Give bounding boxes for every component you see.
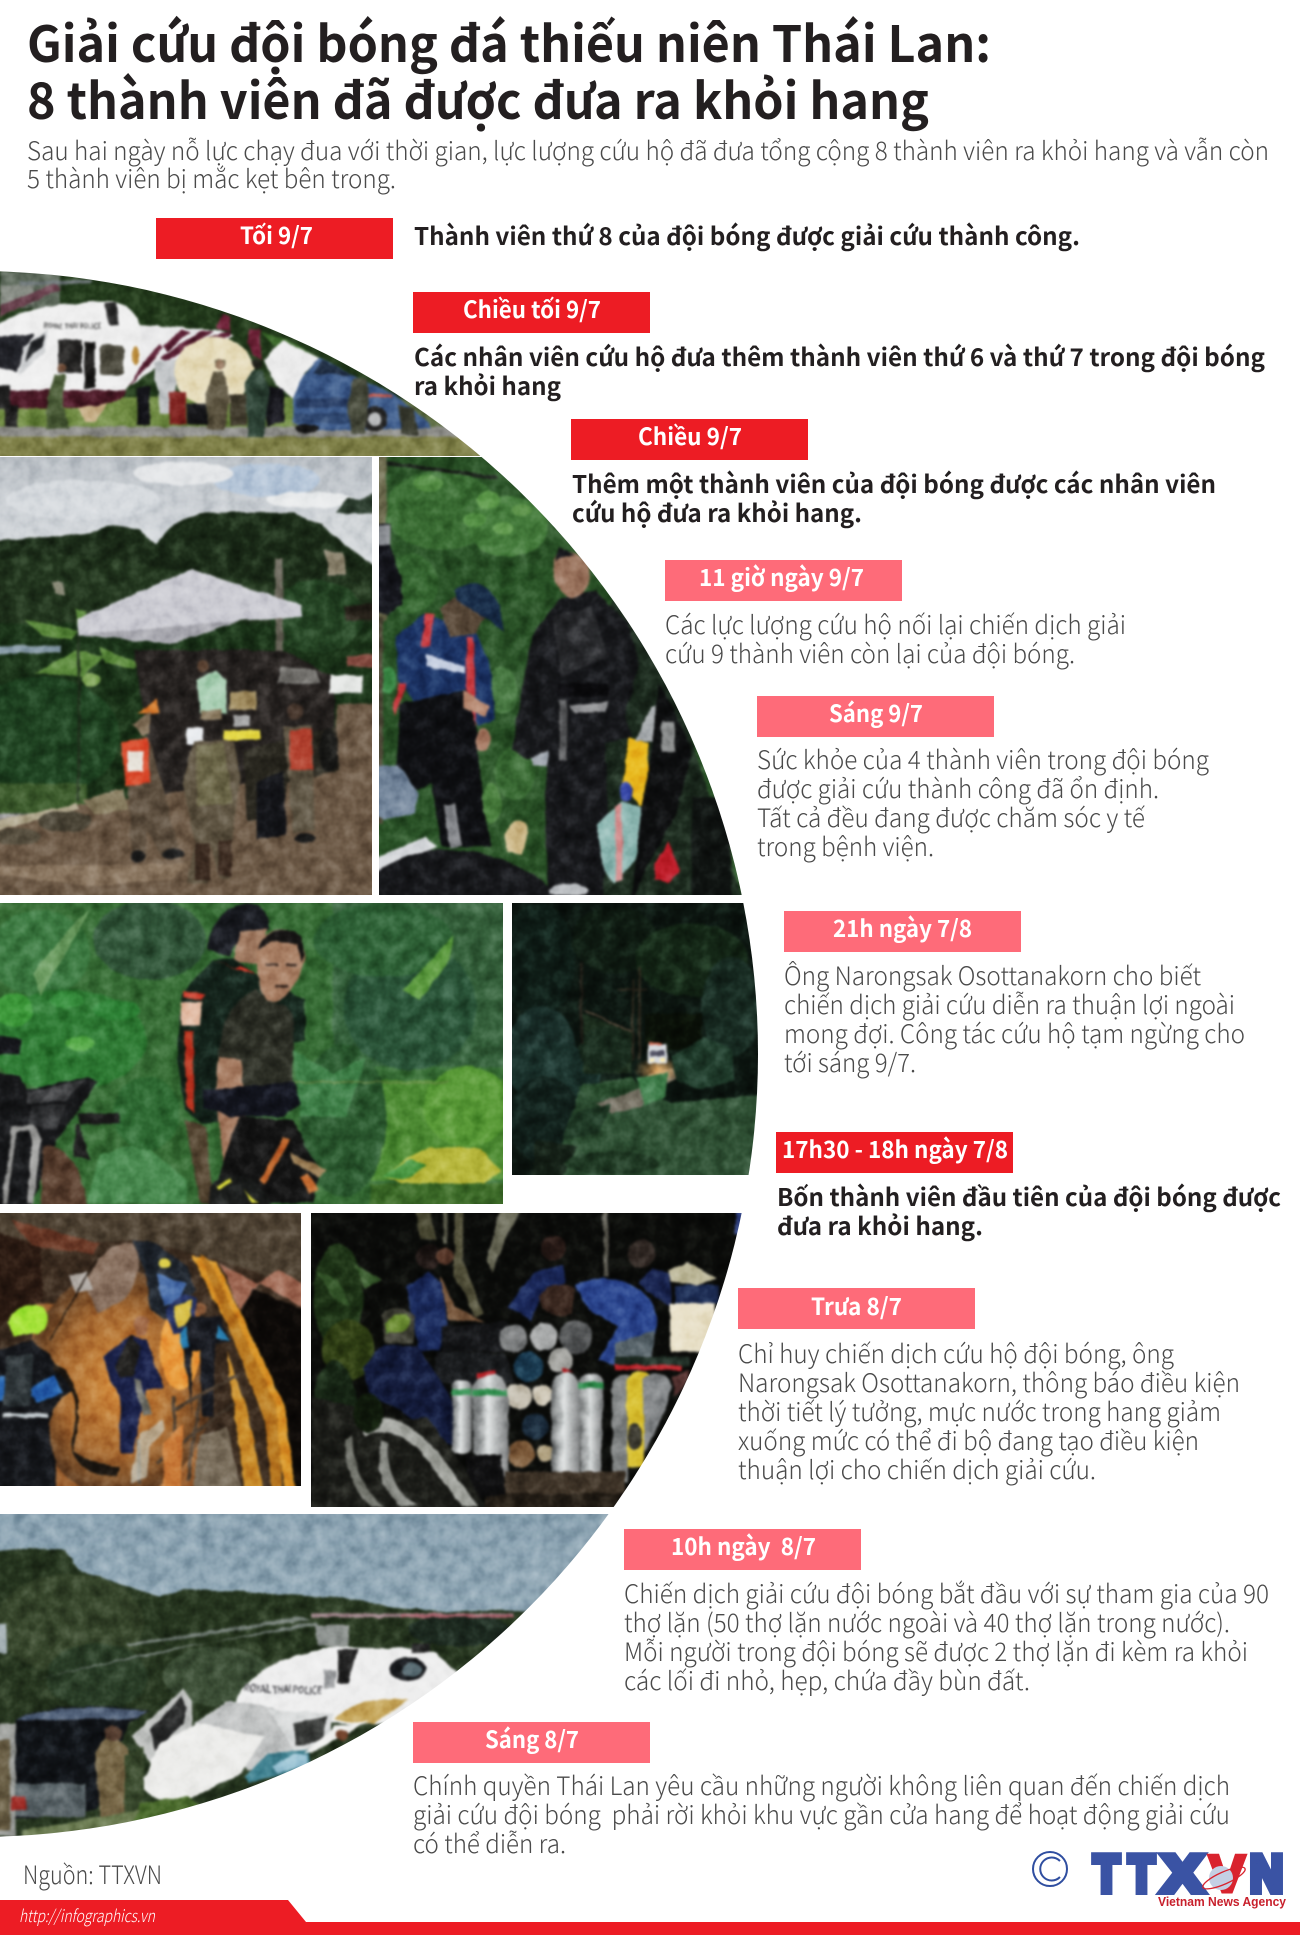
photo: ambulance on a dark forest road — [512, 903, 758, 1175]
timeline item: Trưa 8/7: thời tiết lý tưởng, mực nước trong hang giảm — [738, 1392, 1221, 1429]
icon: globe with orbit — [1201, 1863, 1247, 1893]
timeline item: 21h ngày 7/8: chiến dịch giải cứu diễn ra thuận lợi ngoài — [784, 985, 1235, 1022]
timeline item: Trưa 8/7: Narongsak Osottanakorn, thông báo điều kiện — [738, 1363, 1240, 1400]
timeline item: 11 giờ ngày 9/7: cứu 9 thành viên còn lại của đội bóng. — [665, 634, 1075, 671]
timeline item: 21h ngày 7/8: 21h ngày 7/8 — [833, 910, 972, 944]
photo: police helicopter on the ground — [0, 271, 480, 456]
photo: police helicopter on the ground: ROYAL THAI POLICE — [44, 320, 102, 331]
title: 8 thành viên đã được đưa ra khỏi hang — [27, 62, 929, 134]
photo: police helicopter with umbrellas — [0, 1514, 608, 1837]
timeline item: Trưa 8/7: thuận lợi cho chiến dịch giải cứu. — [738, 1450, 1096, 1487]
timeline item: Chiều tối 9/7: Chiều tối 9/7 — [463, 291, 601, 325]
timeline item: Chiều tối 9/7: ra khỏi hang — [414, 368, 561, 403]
title: Giải cứu đội bóng đá thiếu niên Thái Lan: — [27, 5, 991, 77]
timeline item: Chiều tối 9/7: Các nhân viên cứu hộ đưa thêm thành viên thứ 6 và thứ 7 trong đội bóng — [414, 339, 1265, 374]
timeline item: Sáng 9/7: Sức khỏe của 4 thành viên trong đội bóng — [757, 740, 1209, 777]
timeline item: 17h30 - 18h ngày 7/8: đưa ra khỏi hang. — [777, 1208, 983, 1243]
timeline item: 10h ngày 8/7: thợ lặn (50 thợ lặn nước ngoài và 40 thợ lặn trong nước). — [624, 1603, 1230, 1640]
timeline item: Trưa 8/7: Chỉ huy chiến dịch cứu hộ đội bóng, ông — [738, 1334, 1174, 1371]
timeline item: Sáng 8/7 — [413, 1721, 1230, 1861]
timeline item: Sáng 9/7: trong bệnh viện. — [757, 827, 934, 864]
logo: TTXVN Vietnam News Agency: T — [1128, 1846, 1155, 1904]
timeline item: 10h ngày 8/7: các lối đi nhỏ, hẹp, chứa đầy bùn đất. — [624, 1661, 1030, 1698]
footer bar: http://infographics.vn — [19, 1902, 156, 1927]
timeline item: Sáng 8/7: Chính quyền Thái Lan yêu cầu những người không liên quan đến chiến dịch — [413, 1766, 1230, 1803]
photo collage clipped to circular arc — [0, 252, 795, 1863]
logo: TTXVN Vietnam News Agency: N — [1250, 1846, 1283, 1904]
footer bar — [0, 1900, 1300, 1935]
subtitle: 5 thành viên bị mắc kẹt bên trong. — [27, 159, 396, 196]
timeline item: 21h ngày 7/8: tới sáng 9/7. — [784, 1043, 916, 1080]
logo: TTXVN Vietnam News Agency: T — [1094, 1846, 1120, 1904]
photo: oxygen tanks at night — [311, 1213, 742, 1507]
timeline item: Chiều 9/7: Chiều 9/7 — [638, 418, 742, 452]
timeline item: Trưa 8/7: xuống mức có thể đi bộ đang tạo điều kiện — [738, 1421, 1199, 1458]
timeline item: Trưa 8/7 — [738, 1288, 1240, 1487]
timeline item: Sáng 8/7: giải cứu đội bóng phải rời khỏi khu vực gần cửa hang để hoạt động giải cứu — [413, 1795, 1230, 1832]
timeline item: Trưa 8/7: Trưa 8/7 — [811, 1288, 902, 1322]
timeline item: Sáng 9/7: Sáng 9/7 — [829, 695, 923, 729]
timeline item: Chiều 9/7: cứu hộ đưa ra khỏi hang. — [572, 495, 862, 530]
photo: rescuers climbing in the cave — [0, 1213, 301, 1486]
logo: TTXVN Vietnam News Agency — [1033, 1846, 1287, 1909]
timeline item: 11 giờ ngày 9/7 — [665, 559, 1126, 671]
timeline item: 17h30 - 18h ngày 7/8: 17h30 - 18h ngày 7/8 — [782, 1131, 1008, 1165]
timeline item: 10h ngày 8/7: Mỗi người trong đội bóng sẽ được 2 thợ lặn đi kèm ra khỏi — [624, 1632, 1248, 1669]
source credit: Nguồn: TTXVN — [23, 1855, 162, 1892]
title — [27, 5, 991, 134]
logo: TTXVN Vietnam News Agency: X — [1162, 1846, 1203, 1904]
timeline item: 21h ngày 7/8: mong đợi. Công tác cứu hộ tạm ngừng cho — [784, 1014, 1245, 1051]
timeline item: Tối 9/7: Tối 9/7 — [240, 217, 313, 251]
photo: police helicopter with umbrellas: ROYAL THAI POLICE — [244, 1681, 323, 1698]
timeline item: 10h ngày 8/7 — [624, 1528, 1269, 1698]
timeline item: Sáng 9/7: được giải cứu thành công đã ổn định. — [757, 769, 1159, 806]
timeline item: 10h ngày 8/7: Chiến dịch giải cứu đội bóng bắt đầu với sự tham gia của 90 — [624, 1574, 1269, 1611]
photo: two rescue workers — [0, 903, 503, 1204]
timeline item: Sáng 9/7 — [757, 695, 1209, 864]
timeline item: Tối 9/7: Thành viên thứ 8 của đội bóng được giải cứu thành công. — [414, 218, 1080, 253]
timeline item: Chiều 9/7: Thêm một thành viên của đội bóng được các nhân viên — [572, 466, 1216, 501]
timeline item: 17h30 - 18h ngày 7/8 — [776, 1131, 1281, 1243]
timeline item: 11 giờ ngày 9/7: 11 giờ ngày 9/7 — [699, 559, 864, 593]
timeline item: 21h ngày 7/8: Ông Narongsak Osottanakorn cho biết — [784, 956, 1201, 993]
timeline item: 17h30 - 18h ngày 7/8: Bốn thành viên đầu tiên của đội bóng được — [777, 1179, 1281, 1214]
timeline item: Sáng 9/7: Tất cả đều đang được chăm sóc y tế — [757, 798, 1145, 835]
timeline item: Chiều 9/7 — [571, 418, 1216, 530]
photo: tent by the mountain — [0, 457, 372, 895]
icon: copyright sign — [1033, 1852, 1067, 1886]
subtitle — [27, 131, 1269, 196]
timeline item: 21h ngày 7/8 — [784, 910, 1245, 1080]
timeline item: 10h ngày 8/7: 10h ngày 8/7 — [671, 1528, 816, 1562]
timeline item: Tối 9/7 — [156, 217, 1080, 259]
logo: TTXVN Vietnam News Agency: V — [1209, 1846, 1245, 1904]
timeline item: Sáng 8/7: có thể diễn ra. — [413, 1824, 566, 1861]
timeline item: Chiều tối 9/7 — [413, 291, 1265, 403]
logo: TTXVN Vietnam News Agency: Vietnam News Agency — [1158, 1894, 1287, 1909]
timeline item: Sáng 8/7: Sáng 8/7 — [485, 1721, 579, 1755]
subtitle: Sau hai ngày nỗ lực chạy đua với thời gian, lực lượng cứu hộ đã đưa tổng cộng 8 thành viên ra khỏi hang và vẫn còn — [27, 131, 1269, 168]
timeline item: 11 giờ ngày 9/7: Các lực lượng cứu hộ nối lại chiến dịch giải — [665, 605, 1126, 642]
photo: rescue divers in the jungle — [379, 457, 742, 895]
